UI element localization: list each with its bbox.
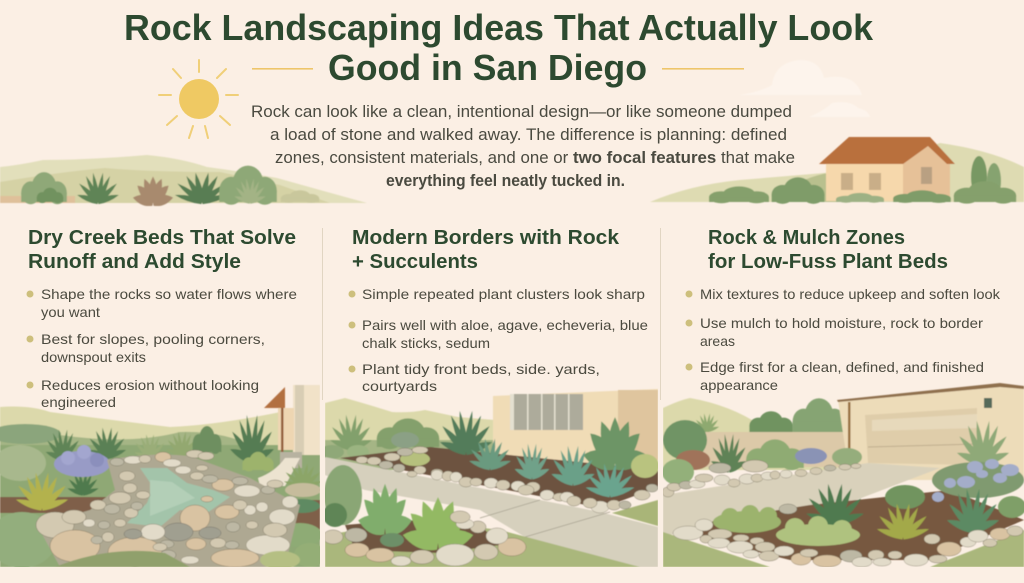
driveway — [663, 463, 940, 535]
bullet list: courtyards — [362, 378, 437, 394]
bullet list: Use mulch to hold moisture, rock to border — [700, 315, 983, 331]
concrete path — [325, 457, 658, 567]
bullet list — [26, 286, 297, 410]
bullet list: Simple repeated plant clusters look sharp — [362, 286, 645, 302]
garage — [837, 383, 1024, 480]
back wall — [700, 432, 850, 467]
bullet list: engineered — [41, 394, 116, 410]
heading: for Low-Fuss Plant Beds — [708, 250, 948, 273]
rock bed — [37, 455, 300, 567]
lawn corners — [663, 532, 770, 567]
illustration: garage and plant beds — [662, 383, 1024, 567]
clouds — [739, 60, 870, 117]
bullet list: Best for slopes, pooling corners, — [41, 331, 265, 347]
bullet list — [348, 286, 648, 394]
bullet list: chalk sticks, sedum — [362, 335, 490, 351]
flowers and shrubs — [932, 462, 1024, 498]
hills — [650, 143, 1024, 202]
panel: rock and mulch zones — [662, 226, 1024, 567]
bullet list: Pairs well with aloe, agave, echeveria, blue — [362, 317, 648, 333]
heading: Runoff and Add Style — [28, 250, 241, 273]
back plantings — [663, 420, 707, 460]
wall and roof — [258, 385, 320, 486]
bullet list: Mix textures to reduce upkeep and soften look — [700, 286, 1001, 302]
heading: Rock & Mulch Zones — [708, 226, 905, 249]
building — [493, 389, 658, 470]
intro paragraph: Rock can look like a clean, intentional design—or like someone dumped — [251, 103, 792, 121]
intro paragraph: zones, consistent materials, and one or two focal features that make — [275, 149, 795, 167]
column dividers — [322, 228, 661, 400]
illustration: dry creek bed — [0, 385, 326, 569]
heading — [352, 226, 620, 273]
intro paragraph: a load of stone and walked away. The difference is planning: defined — [270, 126, 787, 144]
right header landscape with house — [650, 60, 1024, 204]
illustration: rock border and path — [320, 389, 659, 567]
bullet list: appearance — [700, 377, 778, 393]
bullet list: Plant tidy front beds, side. yards, — [362, 361, 600, 377]
lower rock edge — [673, 504, 1023, 567]
left header landscape — [0, 155, 367, 207]
panel: modern borders — [320, 226, 659, 567]
intro paragraph: everything feel neatly tucked in. — [386, 172, 625, 190]
upper rock edge — [662, 460, 861, 497]
bullet list: Edge first for a clean, defined, and finished — [700, 359, 984, 375]
succulents and plants — [439, 410, 493, 456]
rocks — [36, 450, 298, 567]
title: Rock Landscaping Ideas That Actually Look — [124, 7, 874, 48]
plants — [46, 430, 79, 460]
panel: dry creek beds — [0, 226, 326, 569]
border rocks — [356, 446, 658, 513]
lawn — [612, 500, 658, 526]
agapanthus flowers — [54, 445, 110, 477]
distant shrubs — [330, 415, 372, 450]
heading: + Succulents — [352, 250, 478, 273]
bullet list: you want — [41, 304, 100, 320]
title: Good in San Diego — [328, 47, 647, 88]
bullet list: downspout exits — [41, 349, 146, 365]
heading — [708, 226, 948, 273]
icon: house — [819, 137, 955, 201]
bullet list — [686, 286, 1001, 393]
mulch bed — [690, 490, 1024, 560]
bullet list: Reduces erosion without looking — [41, 377, 259, 393]
water channel — [127, 468, 230, 527]
heading: Modern Borders with Rock — [352, 226, 620, 249]
heading — [28, 226, 296, 273]
title — [124, 7, 874, 88]
bullet list: Shape the rocks so water flows where — [41, 286, 297, 302]
intro paragraph — [251, 103, 795, 190]
mulch bed — [340, 447, 658, 508]
icon: sun — [159, 60, 238, 138]
bullet list: areas — [700, 333, 735, 349]
heading: Dry Creek Beds That Solve — [28, 226, 296, 249]
